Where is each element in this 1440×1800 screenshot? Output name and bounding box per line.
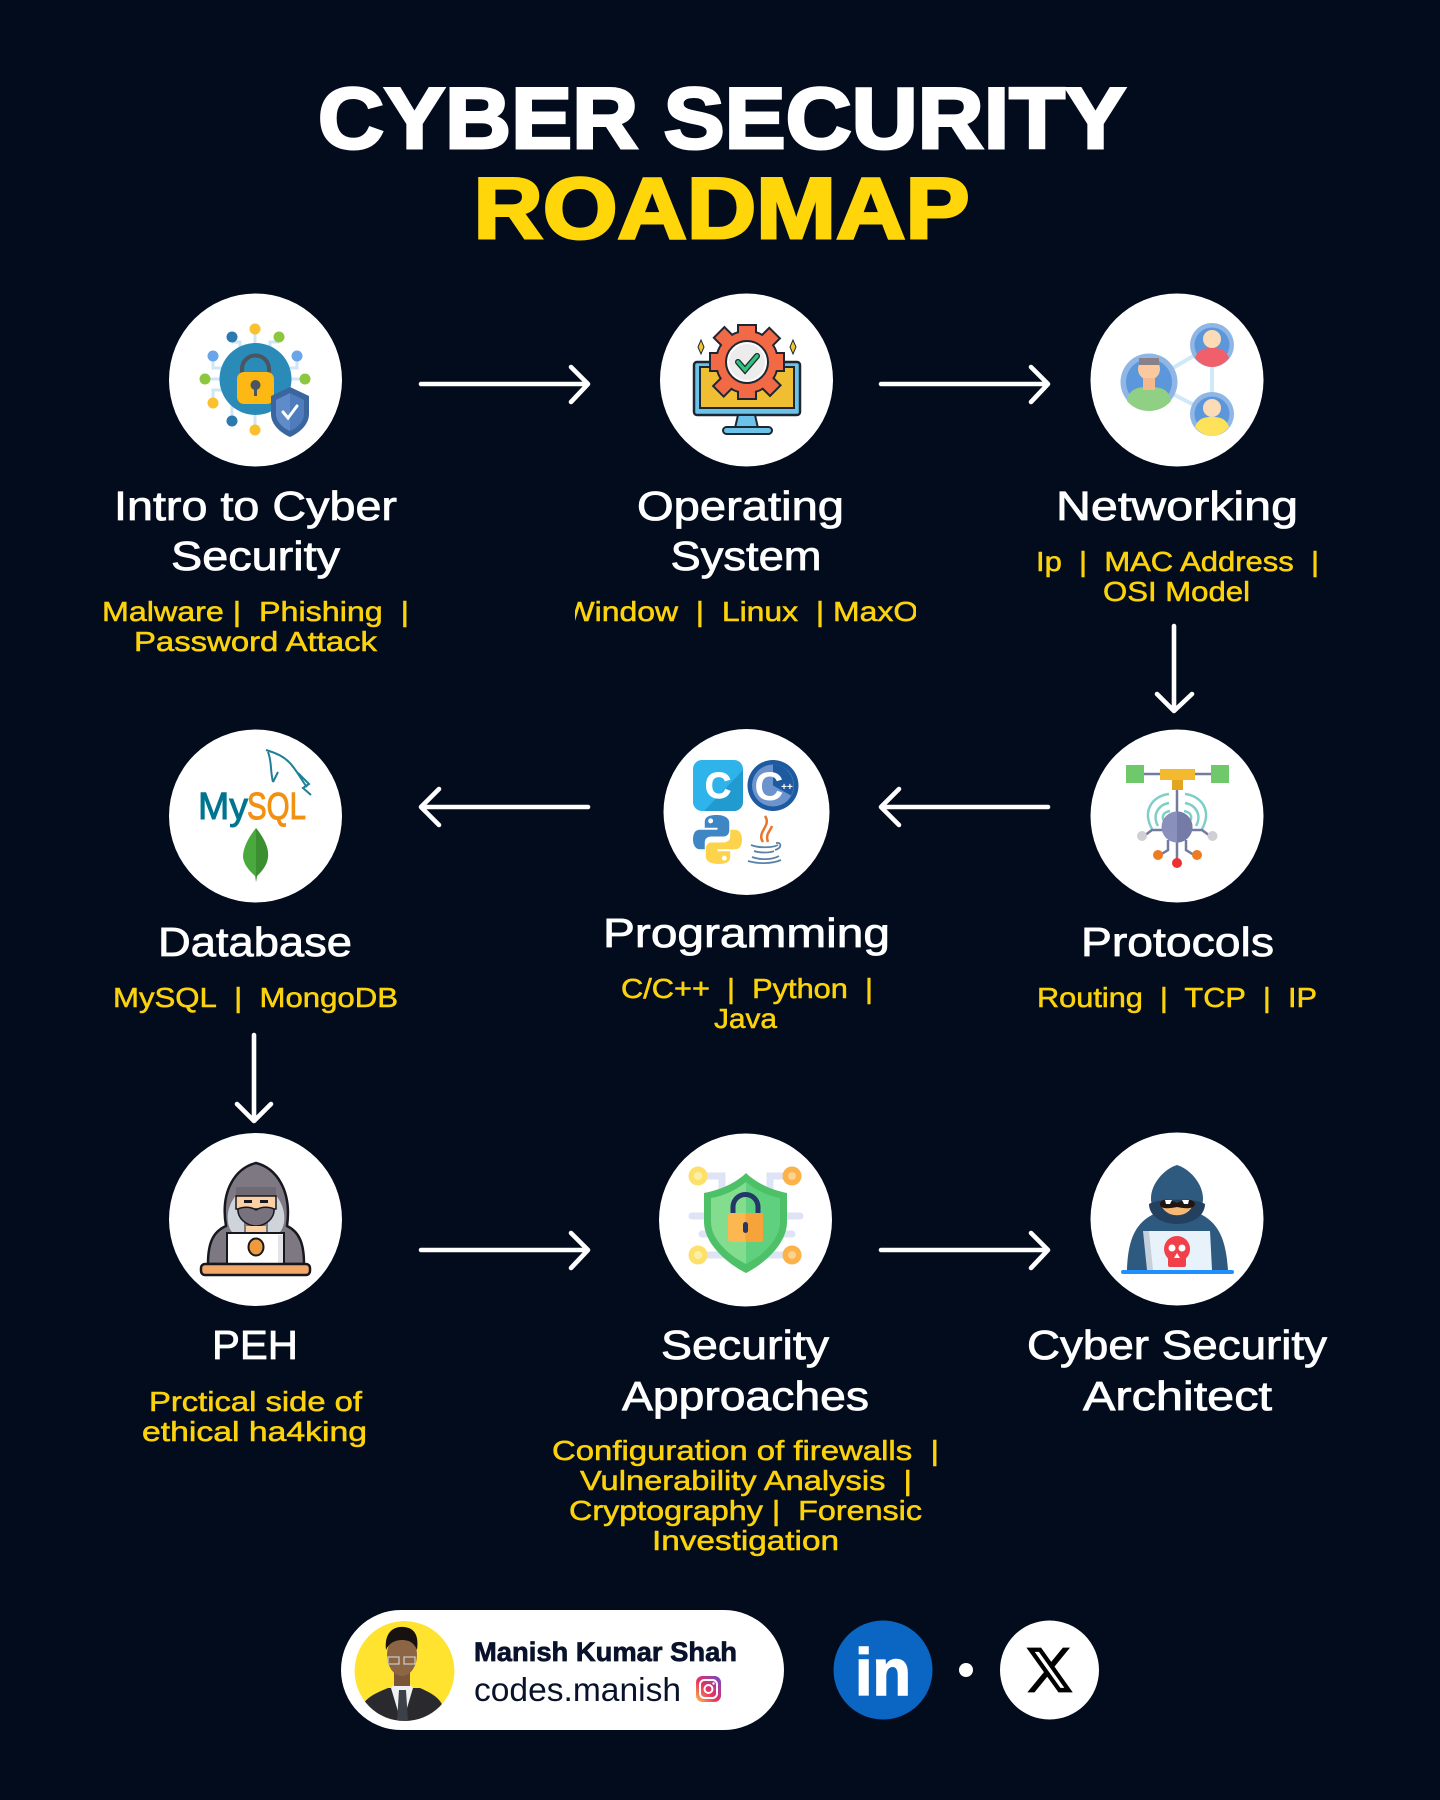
step: Intro to Cyber Security: [102, 294, 409, 657]
icon: MySQL and MongoDB: [169, 730, 342, 902]
subtopics: Password Attack: [134, 626, 378, 657]
arrow: protocols to programming: [881, 789, 1048, 825]
icon: monitor with gear: [660, 294, 833, 466]
icon: lock and shield: [169, 294, 342, 466]
subtopics: C/C++ | Python |: [621, 973, 873, 1004]
separator dot: [959, 1663, 973, 1677]
heading: Operating: [637, 483, 844, 529]
subtopics: ethical ha4king: [142, 1416, 367, 1447]
icon: MySQL and MongoDB: SQL: [247, 786, 306, 828]
arrow: database to PEH: [237, 1035, 271, 1121]
heading: Approaches: [622, 1373, 869, 1419]
subtopics: MySQL | MongoDB: [113, 982, 398, 1013]
logo: C++: C: [755, 765, 783, 809]
logo: C: C: [705, 765, 731, 806]
icon: network hub: [1090, 730, 1264, 902]
subtopics: Routing | TCP | IP: [1037, 982, 1317, 1013]
arrow: networking to protocols: [1157, 626, 1192, 711]
icon: green shield with padlock: [659, 1134, 832, 1306]
subtopics: [1036, 546, 1319, 607]
heading: Intro to Cyber: [114, 483, 397, 529]
arrow: programming to database: [421, 789, 588, 825]
icon: instagram: [696, 1676, 721, 1702]
step: Security Approaches: [552, 1134, 939, 1556]
step: Programming: [603, 729, 890, 1034]
arrow: PEH to security approaches: [421, 1233, 588, 1268]
subtopics: OSI Model: [1103, 576, 1250, 607]
subtopics: [621, 973, 873, 1034]
heading: [637, 483, 844, 579]
heading: Architect: [1083, 1373, 1273, 1419]
author photo: [354, 1621, 454, 1725]
arrow: security approaches to architect: [881, 1233, 1048, 1268]
subtopics: Configuration of firewalls |: [552, 1435, 939, 1466]
author name: Manish Kumar Shah: [474, 1637, 737, 1667]
logo: C++: ++: [781, 782, 793, 793]
step: Protocols: [1037, 730, 1317, 1013]
heading: [622, 1322, 869, 1419]
icon: X logo: [1000, 1620, 1099, 1720]
title: [318, 71, 1126, 257]
subtopics: Vulnerability Analysis |: [580, 1465, 912, 1496]
icon: linkedin: in: [855, 1635, 911, 1709]
logo: Java: [748, 816, 781, 863]
subtopics: [142, 1386, 367, 1447]
subtopics: Ip | MAC Address |: [1036, 546, 1319, 577]
heading: System: [670, 533, 822, 579]
title line: CYBER SECURITY: CYBER SECURITY: [318, 71, 1126, 167]
arrow: intro to OS: [421, 367, 588, 402]
heading: Programming: [603, 910, 890, 956]
step: Cyber Security Architect: [1027, 1132, 1328, 1419]
arrow: OS to networking: [881, 367, 1048, 402]
logo: C: [693, 760, 743, 811]
heading: Security: [171, 533, 341, 579]
heading: Security: [661, 1322, 830, 1368]
heading: Protocols: [1081, 919, 1274, 965]
heading: PEH: [212, 1322, 298, 1368]
footer: author pill: [341, 1610, 784, 1730]
icon: MySQL and MongoDB: My: [198, 786, 248, 828]
heading: Database: [158, 919, 352, 965]
step: Networking: [1036, 294, 1319, 607]
subtopics: Prctical side of: [149, 1386, 362, 1417]
step: Operating System: [564, 294, 940, 627]
heading: Cyber Security: [1027, 1322, 1328, 1368]
subtopics: [102, 596, 409, 657]
icon: language logos: [664, 729, 830, 895]
subtopics: [552, 1435, 939, 1556]
heading: [114, 483, 397, 579]
icon: linkedin: [834, 1620, 932, 1720]
heading: [1027, 1322, 1328, 1419]
icon: hooded ethical hacker: [169, 1133, 342, 1306]
logo: Python: [693, 815, 742, 864]
step: PEH: [142, 1133, 367, 1447]
subtopics: Java: [714, 1003, 777, 1034]
author handle: codes.manish: [474, 1671, 681, 1708]
heading: Networking: [1056, 483, 1298, 529]
subtopics: Malware | Phishing |: [102, 596, 409, 627]
icon: hooded figure with skull laptop: [1090, 1132, 1264, 1306]
title line: ROADMAP: ROADMAP: [474, 161, 970, 257]
logo: C++: [748, 760, 798, 811]
subtopics: Investigation: [652, 1525, 839, 1556]
subtopics: Cryptography | Forensic: [569, 1495, 922, 1526]
step: Database: [113, 730, 398, 1013]
icon: people network: [1090, 294, 1264, 466]
subtopics (clipped in the reference): Window | Linux | MaxOS: [564, 596, 940, 627]
